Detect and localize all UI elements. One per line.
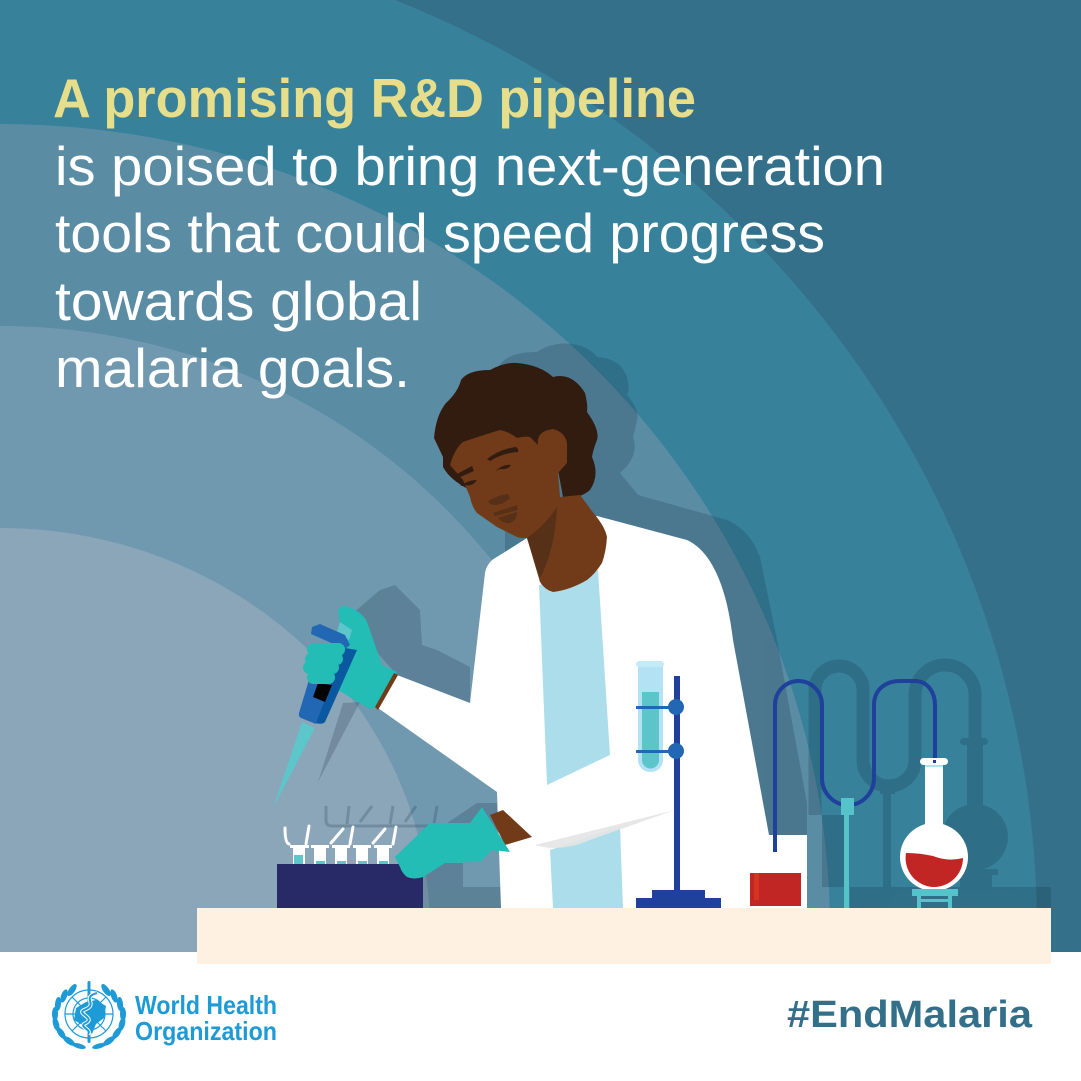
- nose and mouth: [488, 494, 518, 523]
- eyebrows: [455, 447, 518, 478]
- pipette tip: [273, 722, 315, 808]
- illustration: light blue shirt: [539, 570, 623, 908]
- wrist: [375, 673, 398, 710]
- hair: [434, 363, 598, 498]
- eyes: [460, 465, 511, 486]
- illustration: test tube on clamp stand: [636, 661, 721, 908]
- icon: WHO emblem: [51, 981, 127, 1050]
- heading: headline text: is poised to bring next-generation: [55, 135, 885, 197]
- logo: World Health Organization: [51, 981, 277, 1050]
- illustration: pipette held in gloved hand: [273, 606, 398, 808]
- neck shadow: [527, 507, 557, 578]
- face and neck: [450, 429, 607, 592]
- illustration: lower glove and wrist: [395, 807, 532, 878]
- illustration: tubing, stand and beaker: [750, 681, 935, 908]
- illustration: test tube rack with vials: [277, 826, 423, 908]
- illustration: lab coat body and arms: [378, 516, 807, 908]
- pipette screen: [313, 683, 332, 702]
- pipette body: [299, 655, 345, 724]
- illustration: scientist head and neck: [434, 363, 607, 592]
- heading: headline text: A promising R&D pipeline: [53, 67, 696, 129]
- plunger: [337, 622, 352, 640]
- illustration: sleeve fold shadow: [535, 810, 675, 848]
- illustration: round-bottom flask with red liquid: [900, 758, 968, 908]
- heading: headline text: malaria goals.: [55, 337, 410, 399]
- logo text: World Health: [135, 990, 277, 1020]
- hashtag: #EndMalaria: [787, 994, 1033, 1036]
- heading: headline text: [53, 67, 885, 399]
- fingers: [303, 643, 345, 684]
- lab bench: [197, 908, 1051, 964]
- illustration: scientist's cast shadow on the background: [318, 344, 1051, 908]
- logo: World Health Organization: Organization: [135, 1016, 277, 1046]
- heading: headline text: towards global: [55, 270, 422, 332]
- heading: headline text: tools that could speed progress: [55, 202, 825, 264]
- upper glove: [338, 606, 397, 709]
